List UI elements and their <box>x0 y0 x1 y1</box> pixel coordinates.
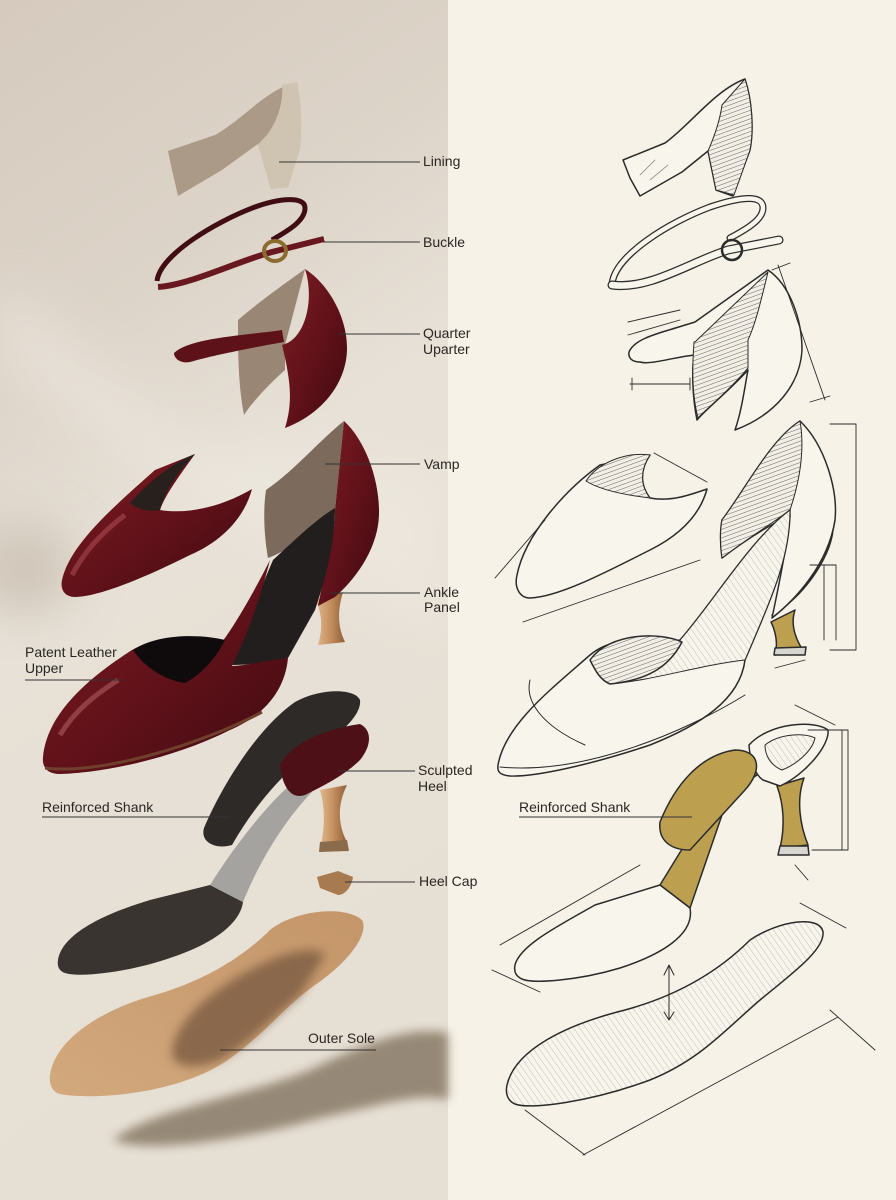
sketch: shank section <box>492 705 848 992</box>
label: Reinforced Shank right: Reinforced Shank <box>519 799 631 815</box>
label: Lining: Lining <box>423 153 460 169</box>
sketch: buckle strap <box>612 198 779 286</box>
sketch: lining <box>623 79 752 196</box>
label: Vamp: Vamp <box>424 456 460 472</box>
label: Outer Sole: Outer Sole <box>308 1030 375 1046</box>
panel: sketch exploded shoe <box>492 79 875 1155</box>
label: Ankle Panel: Ankle <box>424 584 459 600</box>
label: Heel Cap <box>345 873 478 889</box>
lining part <box>168 82 301 196</box>
heel cap part <box>317 871 353 895</box>
label: Patent Leather Upper: Patent Leather <box>25 644 117 660</box>
sketch: quarter <box>628 263 830 430</box>
label: Quarter Uparter: Quarter <box>423 325 471 341</box>
vamp part <box>62 454 252 597</box>
label: Quarter Uparter <box>338 325 471 357</box>
label: Vamp <box>325 456 460 472</box>
label: Ankle Panel: Panel <box>424 599 460 615</box>
panel: photographic background <box>0 0 448 1200</box>
assembled shoe <box>43 421 379 774</box>
sketch: outer sole <box>506 903 875 1155</box>
label: Sculpted Heel <box>338 762 472 794</box>
label: Reinforced Shank left: Reinforced Shank <box>42 799 154 815</box>
outer sole part <box>50 911 364 1096</box>
panel: photographic exploded shoe <box>43 82 448 1146</box>
label: Buckle: Buckle <box>423 234 465 250</box>
label: Sculpted Heel: Heel <box>418 778 447 794</box>
label: Patent Leather Upper: Upper <box>25 660 63 676</box>
label: Ankle Panel <box>330 584 460 615</box>
sketch: vamp <box>495 453 707 622</box>
buckle strap <box>157 200 324 287</box>
label: Patent Leather Upper <box>25 644 122 680</box>
sketch: assembled shoe <box>498 421 856 776</box>
label: Quarter Uparter: Uparter <box>423 341 470 357</box>
sole shadow <box>113 1031 448 1146</box>
label: Sculpted Heel: Sculpted <box>418 762 472 778</box>
quarter part <box>174 269 347 428</box>
label: Heel Cap: Heel Cap <box>419 873 478 889</box>
reinforced shank and heel <box>58 691 369 975</box>
panel: sketch background <box>448 0 896 1200</box>
